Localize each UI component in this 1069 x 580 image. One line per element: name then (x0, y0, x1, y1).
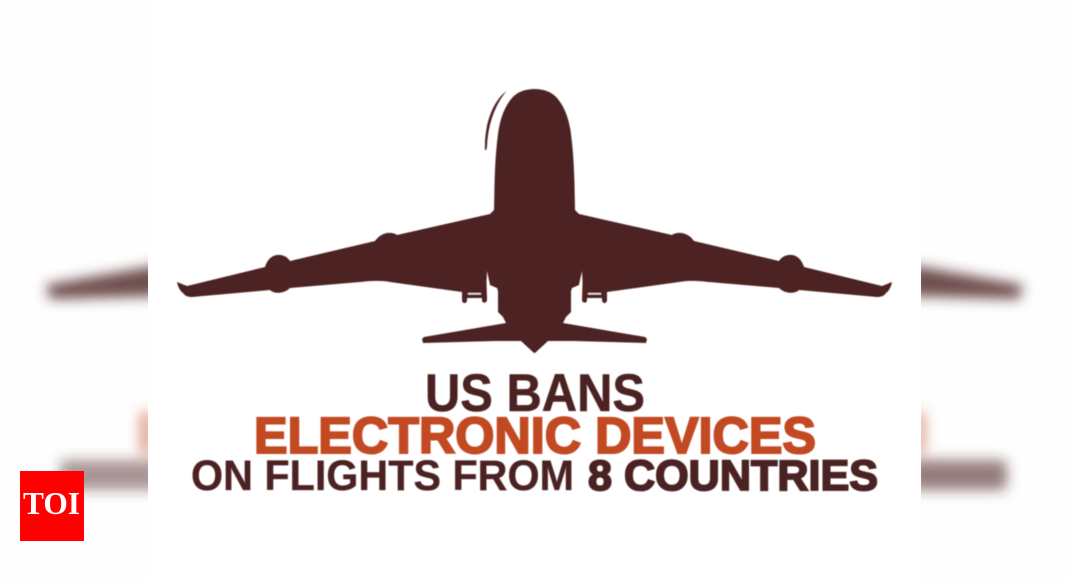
central white panel (148, 0, 921, 580)
title line: 8 COUNTRIES: 8 COUNTRIES (588, 452, 878, 500)
airplane silhouette (177, 89, 892, 353)
icon: motion swoosh beside the nose (485, 91, 506, 150)
title line: US BANS: US BANS (425, 364, 645, 423)
title line: ON FLIGHTS FROM: ON FLIGHTS FROM (191, 452, 574, 500)
title (191, 364, 878, 500)
logo: TOI (20, 471, 84, 541)
blurred backdrop: enlarged plane wings and title (46, 265, 1023, 490)
logo: TOI: TOI (23, 485, 80, 521)
title line: ELECTRONIC DEVICES: ELECTRONIC DEVICES (254, 407, 816, 464)
